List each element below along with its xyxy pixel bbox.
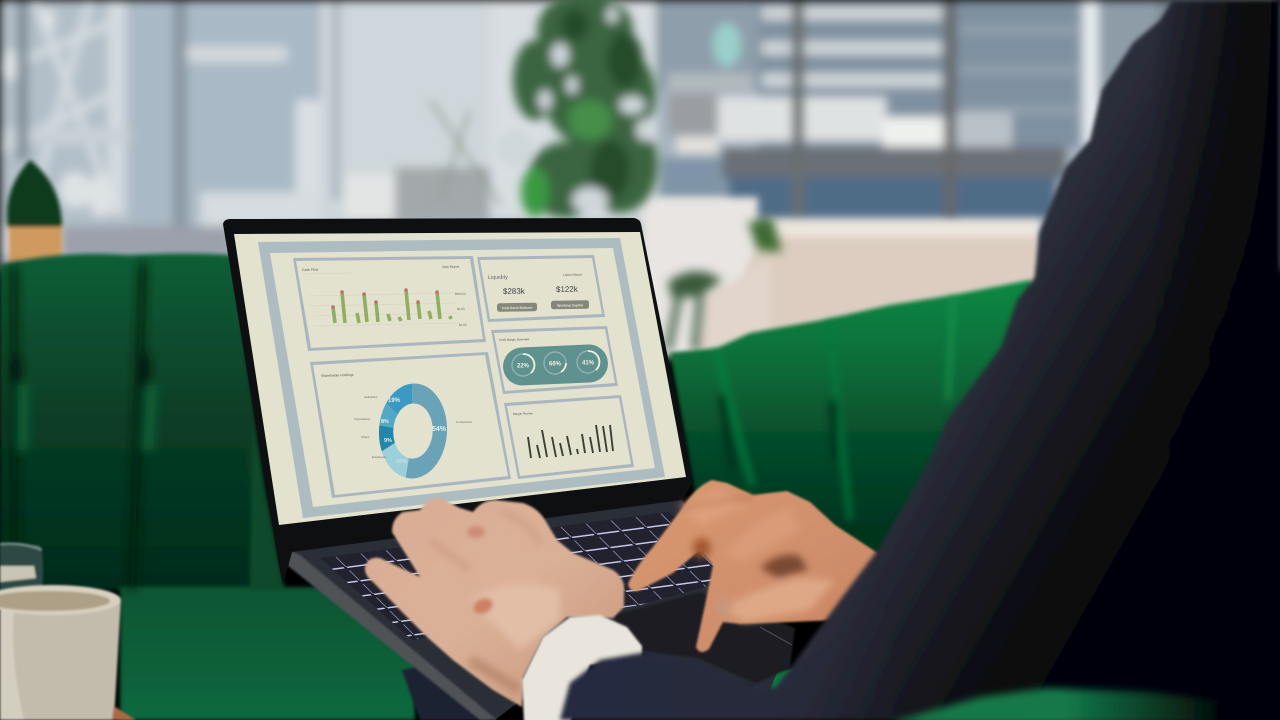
laptop screen: dashboard [234, 232, 686, 525]
gauge pill background [502, 344, 609, 386]
gauge 22 percent: 22% [517, 364, 530, 370]
monthly bars [528, 425, 613, 458]
sofa: small green patch by trackpad [750, 668, 795, 692]
donut panel heading: Shareholder Holdings [321, 373, 354, 378]
icon: small potted plant [7, 160, 62, 263]
suit sleeve shading [560, 600, 900, 720]
panel: liquidity [477, 255, 605, 322]
shirt cuff [522, 615, 642, 720]
dashboard outer frame [258, 238, 665, 518]
businessman: suit sleeve and back [560, 0, 1280, 720]
chart report label: View Report [442, 265, 459, 269]
left hand [365, 498, 624, 707]
panel: monthly bars [504, 395, 634, 479]
glass of water [0, 544, 43, 592]
panel: line and bar chart: $0.00 [457, 307, 465, 311]
navy trouser leg [402, 665, 490, 720]
sofa: bottom green strip [885, 688, 1215, 720]
chart axis values: $500.00 [455, 292, 466, 296]
panel: donut chart [310, 352, 511, 498]
panel: donut chart: In Vest Fund [456, 420, 472, 424]
right hand [628, 480, 885, 652]
panel: gauges [491, 326, 618, 394]
donut chart: 15% [396, 459, 407, 465]
background: wall and white ledge [642, 197, 1040, 357]
liquidity report label: Latest Report [563, 273, 582, 277]
laptop: keyboard deck [287, 500, 795, 720]
gauge 41 percent: 41% [582, 360, 595, 366]
screen background [234, 232, 686, 525]
sofa: right back tufts [670, 280, 1040, 620]
panel: donut chart: Others [361, 435, 370, 439]
suit top right fade [1150, 0, 1280, 720]
donut chart: 54% [432, 426, 447, 433]
panel: line and bar chart [293, 256, 486, 351]
laptop: lid bezel [223, 218, 693, 585]
coffee mug [0, 585, 136, 720]
panel: donut chart: Corporations [354, 417, 371, 421]
donut callouts: Institutions [364, 395, 378, 399]
sofa: left back and seat [0, 254, 415, 720]
panel: donut chart: Employees [372, 455, 386, 459]
donut chart [381, 388, 447, 474]
panel: line and bar chart: $0.00 [459, 323, 467, 327]
donut chart: 8% [381, 419, 389, 425]
button: total bank balance: Total Bank Balance [501, 306, 533, 310]
gauges heading: Profit Margin Overview [499, 337, 530, 342]
chart bar tips [331, 288, 439, 309]
chart bars [333, 290, 451, 323]
liquidity heading: Liquidity [488, 275, 508, 281]
chart title: Cash Flow [302, 268, 319, 272]
donut labels: 19% [388, 398, 401, 404]
laptop [223, 218, 795, 720]
working capital value: $122k [556, 285, 579, 294]
icon: blurred indoor plant [430, 0, 782, 350]
donut chart: 9% [384, 438, 392, 444]
monthly bars heading: Margin Review [513, 411, 534, 416]
gauge 66 percent: 66% [549, 362, 562, 368]
total bank balance value: $283k [503, 287, 526, 296]
button: working capital: Working Capital [557, 303, 583, 308]
background: blurred city windows [0, 0, 1280, 270]
suit back shading [560, 0, 1280, 720]
